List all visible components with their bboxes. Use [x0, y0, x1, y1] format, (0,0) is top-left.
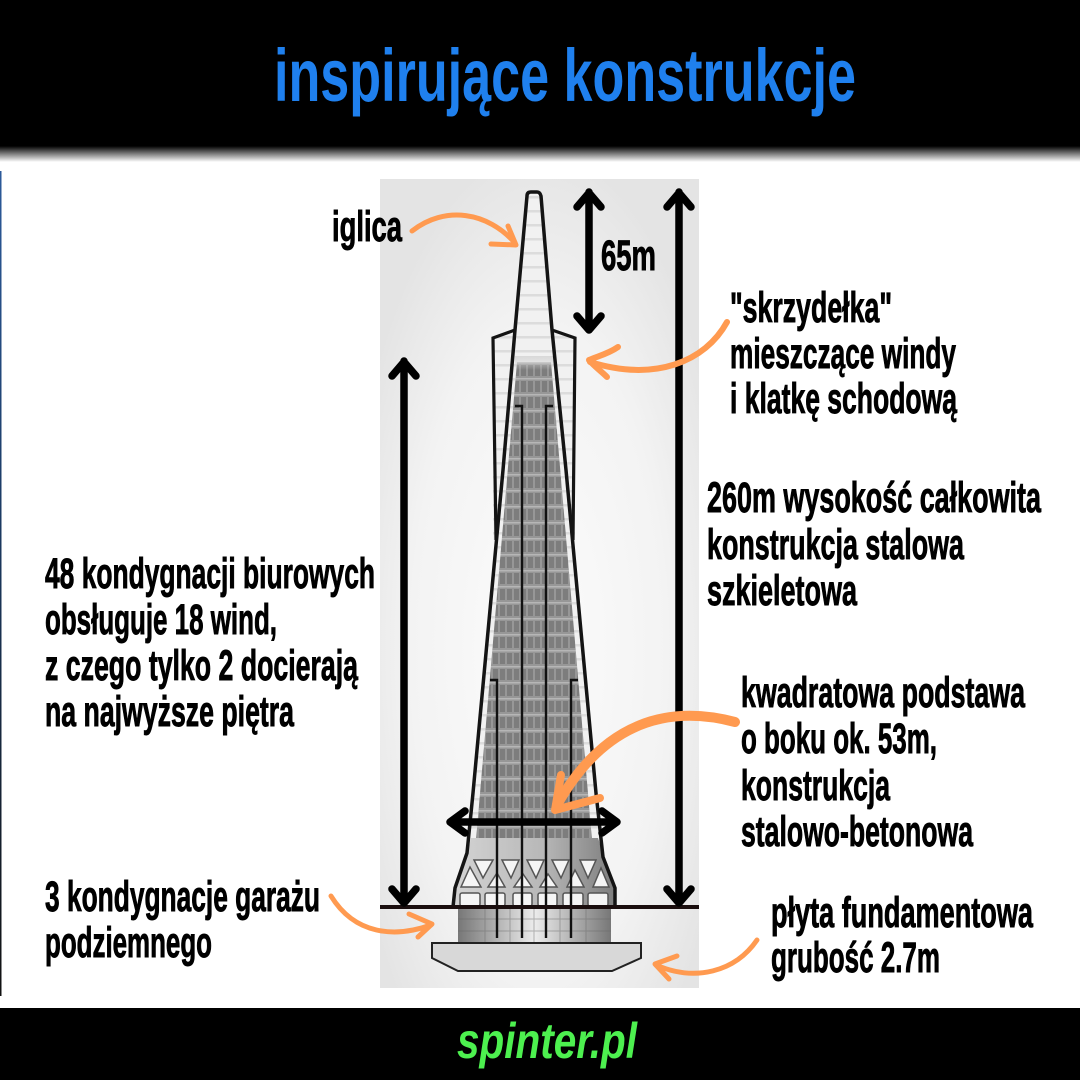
foundation slab: [432, 943, 641, 971]
arrow: spire callout: [412, 215, 516, 245]
text: garage: podziemnego: [45, 919, 212, 967]
arrow: garage callout: [331, 896, 432, 937]
ground line: [380, 905, 699, 909]
arrow: wings callout: [589, 322, 727, 377]
text: wings: "skrzydełka": [730, 284, 892, 332]
text: garage: [45, 873, 320, 967]
spire and upper floors: [467, 192, 603, 857]
panel background: [380, 179, 699, 988]
podium: [453, 838, 615, 907]
wing outline: [493, 330, 575, 540]
text: office floors: na najwyższe piętra: [45, 688, 295, 736]
arrow: base width: [450, 811, 617, 833]
arrow: base callout: [555, 716, 735, 810]
text: foundation: grubość 2.7m: [771, 934, 940, 982]
label: iglica: iglica: [332, 203, 403, 251]
office floors window grid: [476, 362, 592, 840]
text: garage: 3 kondygnacje garażu: [45, 873, 320, 921]
arrow: foundation callout: [655, 940, 757, 979]
text: office floors: 48 kondygnacji biurowych: [45, 550, 375, 598]
text: office floors: obsługuje 18 wind,: [45, 596, 277, 644]
text: wings: [730, 284, 958, 423]
panel: tower diagram: [380, 179, 699, 988]
footer bar: [0, 1008, 1080, 1080]
arrow: total height: [667, 192, 691, 903]
tower drawing: [380, 192, 699, 971]
inner columns: [490, 406, 578, 938]
text: base: konstrukcja: [741, 762, 891, 810]
text: total height: [707, 474, 1042, 615]
tower outline: [453, 192, 615, 907]
text: base: o boku ok. 53m,: [741, 715, 937, 763]
footer brand: spinter.pl: [457, 1013, 638, 1069]
text: foundation: [771, 889, 1034, 982]
arrow: spire height 65m: [577, 192, 601, 330]
label: 65m: 65m: [601, 232, 656, 280]
window grid top fade: [515, 356, 553, 370]
header bar: [0, 0, 1080, 162]
title: inspirujące konstrukcje: [274, 34, 856, 117]
left edge line: [0, 171, 2, 996]
arrow: office floors height: [392, 361, 416, 903]
garage levels: [458, 908, 611, 944]
text: total height: szkieletowa: [707, 567, 858, 615]
text: base: [741, 669, 1026, 856]
text: office floors: [45, 550, 375, 736]
text: office floors: z czego tylko 2 docierają: [45, 642, 359, 690]
